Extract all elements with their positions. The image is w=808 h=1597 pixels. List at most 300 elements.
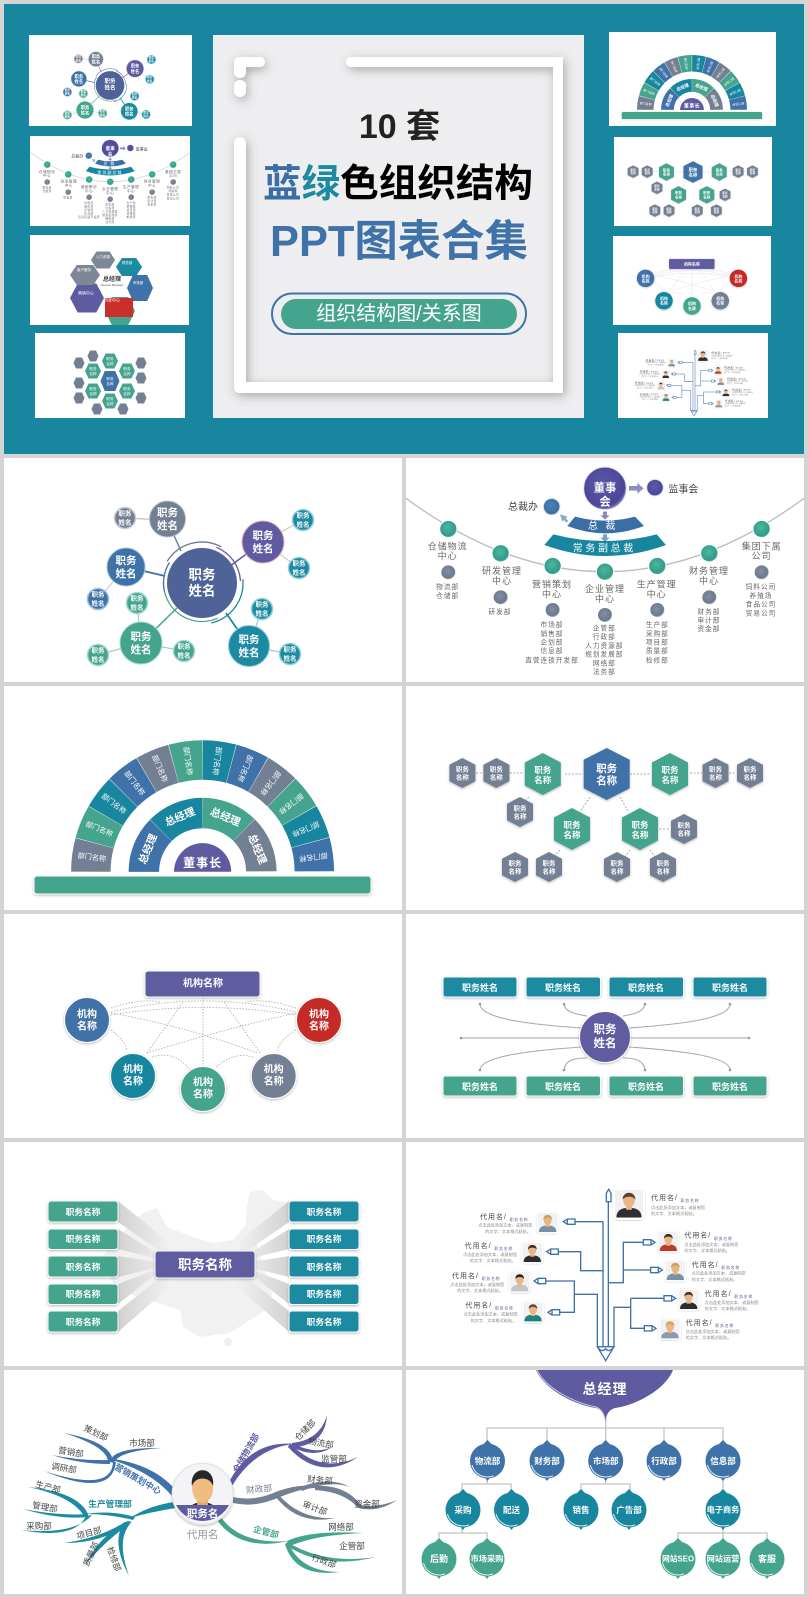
bottom row boxes: 职务姓名: [545, 1081, 581, 1092]
centre box: 职务名称: [178, 1256, 232, 1272]
hexagon labels: 职务: [514, 804, 527, 812]
person text: left 3: 点击此处添加文本，或复制您: [450, 1281, 504, 1287]
department labels: 调研部: [51, 1461, 78, 1475]
person text: right 4: 代用名/: [705, 1289, 732, 1298]
row 3 nodes: [422, 1538, 784, 1579]
president office node: 总裁办: [508, 500, 538, 513]
hexagon labels: 名称: [514, 812, 527, 820]
connector end dots: [460, 1003, 750, 1071]
small node labels: 姓名: [178, 650, 190, 660]
centre circle: 姓名: [594, 1036, 616, 1050]
outer ring labels: 部门名称: [182, 746, 194, 776]
centre box: [155, 1251, 255, 1278]
column: marketing: 直营连锁开发部: [525, 655, 579, 664]
column: enterprise: 网络部: [593, 658, 616, 667]
purple branches: [228, 1415, 358, 1486]
outer ring labels: 部门名称: [291, 819, 321, 839]
hexagon labels: 职务: [678, 820, 691, 830]
circle nodes: [64, 998, 342, 1112]
column: marketing: 企划部: [541, 637, 563, 646]
person text: right 4: 的文字、文本格式粘贴。: [705, 1305, 750, 1311]
right boxes: 职务名称: [307, 1206, 342, 1217]
person text: right 5: [686, 1318, 740, 1340]
left boxes: 职务名称: [66, 1233, 101, 1244]
large node labels: 姓名: [116, 567, 136, 580]
department labels: 监管部: [321, 1454, 347, 1464]
department labels: 仓储部: [292, 1417, 318, 1443]
large node labels: [116, 506, 274, 659]
hexagon labels: 职务: [610, 858, 624, 868]
centre node: 职务: [188, 568, 216, 582]
arrows: [560, 483, 644, 542]
outer ring labels: 部门名称: [236, 753, 255, 783]
connector plugs: [534, 1219, 676, 1331]
department labels: 财务部: [307, 1474, 334, 1486]
hexagon labels: [456, 762, 757, 876]
row 2 nodes: 电子商务: [707, 1504, 739, 1514]
person text: left 2: 职务名称: [494, 1245, 513, 1251]
thumbnail: hexagon flower: [35, 333, 185, 418]
row 1 nodes: 财务部: [534, 1456, 560, 1466]
panel: radial boxes: [406, 914, 804, 1138]
bottom row boxes: [443, 1076, 767, 1096]
circle nodes: 名称: [264, 1074, 284, 1088]
small node labels: 职务: [92, 590, 105, 598]
department labels: 项目部: [75, 1525, 103, 1541]
column: finance: 资金部: [698, 624, 720, 633]
column: marketing: 销售部: [541, 629, 563, 638]
outer ring labels: 部门名称: [100, 791, 128, 816]
person text: left 1: [478, 1212, 532, 1234]
thumbnail: hexagon ring: 营销中心: [78, 290, 94, 296]
heading: 10 set: 10 套: [359, 108, 440, 146]
row 3 nodes: 市场采购: [471, 1554, 503, 1564]
teal branches: [21, 1487, 176, 1576]
person text: top: 点击此处添加文本，或复制您: [651, 1204, 705, 1210]
circle nodes: 机构: [123, 1062, 143, 1076]
blue branches: [44, 1433, 174, 1496]
branch titles: 生产管理部: [88, 1498, 132, 1509]
bottom row boxes: 职务姓名: [712, 1081, 748, 1092]
row 3 nodes: 后勤: [430, 1553, 448, 1564]
person text: left 1: 职务名称: [510, 1216, 528, 1222]
circle nodes: 名称: [77, 1020, 97, 1032]
person text: right 2: 代用名/: [684, 1230, 711, 1239]
thumbnail: hexagon ring: [30, 235, 189, 325]
panel: pencil org chart: [406, 1142, 804, 1366]
hexagon labels: 名称: [744, 772, 757, 782]
outer ring labels: 部门名称: [84, 819, 114, 839]
large node labels: 姓名: [238, 646, 260, 659]
right boxes: 职务名称: [307, 1261, 342, 1272]
row 1 nodes: 市场部: [593, 1456, 619, 1466]
column: enterprise: 规划发展部: [585, 649, 623, 658]
top box: [145, 971, 260, 997]
person text: left 2: 代用名/: [465, 1241, 492, 1250]
small nodes: [88, 508, 314, 666]
general manager bubble: [536, 1370, 673, 1422]
person text: left 1: 点击此处添加文本，或复制您: [478, 1221, 532, 1227]
person text: left 3: 代用名/: [452, 1271, 479, 1280]
small node labels: 职务: [292, 558, 306, 568]
person text: right 3: 代用名/: [692, 1260, 719, 1269]
thumbnail: hexagon ring: 人力资源: [96, 254, 110, 259]
right boxes: 职务名称: [307, 1233, 342, 1244]
small node labels: 姓名: [292, 568, 306, 576]
column: R&D: 研发部: [489, 607, 511, 616]
vice president band: [544, 534, 666, 556]
row 2 nodes: 销售: [572, 1505, 590, 1515]
department labels: [26, 1417, 380, 1573]
hexagon labels: 职务: [508, 858, 522, 868]
hexagon labels: 职务: [490, 764, 503, 774]
small node labels: 姓名: [92, 654, 104, 664]
left boxes: [48, 1201, 118, 1332]
thumbnail: hexagon flower: 职务: [89, 366, 97, 371]
hexagon labels: 职务: [456, 764, 469, 774]
column: marketing: 信息部: [541, 646, 563, 655]
person text: top: 的文字、文本格式粘贴。: [651, 1210, 697, 1216]
column: production: 项目部: [646, 637, 669, 646]
thumbnail: hexagon flower: 职务: [89, 386, 97, 391]
column: warehouse: [428, 520, 468, 600]
department labels: 质量部: [81, 1540, 101, 1568]
column: production: 生产管理: [637, 578, 677, 589]
column: finance: 中心: [699, 575, 719, 586]
thumbnail: hexagon flower: 名称: [123, 371, 131, 376]
hexagon labels: 职务: [709, 764, 722, 774]
outer ring labels: 部门名称: [150, 753, 169, 783]
column: enterprise: 企业管理: [585, 583, 625, 594]
outer ring labels: 部门名称: [277, 791, 305, 816]
subtitle pill: 组织结构图/关系图: [316, 302, 482, 325]
chairman: [174, 843, 231, 872]
column: marketing: 中心: [542, 588, 562, 599]
circle nodes: 名称: [193, 1088, 213, 1100]
supervisory node: [647, 479, 698, 496]
row 2 nodes: 采购: [454, 1505, 472, 1515]
thumbnail: hexagon flower: 名称: [106, 401, 114, 406]
thumbnail: hexagon flower: 职务: [123, 386, 131, 391]
left boxes: 职务名称: [66, 1206, 101, 1217]
circle nodes: 名称: [309, 1020, 329, 1032]
large node labels: 职务: [157, 506, 178, 519]
thumbnail: hexagon ring: 财务部: [122, 260, 133, 265]
rays: [118, 1201, 289, 1332]
hexagons: [449, 748, 763, 882]
person text: right 3: [692, 1260, 746, 1282]
person text: left 4: 代用名/: [465, 1300, 492, 1309]
column: warehouse: 仓储物流: [428, 541, 468, 552]
small node labels: 职务: [92, 646, 105, 654]
top row boxes: 职务姓名: [545, 982, 581, 993]
vice president band: 常务副总裁: [573, 541, 636, 554]
thumbnail: hexagon flower: 名称: [123, 391, 131, 396]
heading: PPT chart collection: PPT图表合集: [270, 218, 528, 266]
department labels: 营销部: [58, 1445, 85, 1459]
department labels: 检修部: [105, 1545, 123, 1573]
panel: cover: [4, 4, 804, 454]
department labels: 行政部: [310, 1552, 338, 1570]
outer ring labels: 部门名称: [258, 769, 283, 797]
thumbnail: board structure: [30, 136, 190, 226]
hexagon labels: 名称: [656, 866, 670, 876]
column: finance: 财务管理: [689, 565, 729, 576]
centre node: [146, 527, 258, 639]
column: enterprise: 行政部: [593, 632, 616, 641]
column: enterprise: 人力资源部: [585, 641, 623, 650]
centre node: 姓名: [188, 582, 216, 598]
thumbnail: hexagon flower: 名称: [89, 371, 97, 376]
person text: left 3: [450, 1271, 504, 1293]
thumbnail: hexagon flower: 名称: [89, 391, 97, 396]
column: warehouse: 仓储部: [436, 591, 459, 600]
column: R&D: 研发管理: [482, 565, 522, 576]
small node labels: 姓名: [296, 520, 310, 528]
column: R&D: 中心: [492, 575, 512, 586]
small node labels: 职务: [256, 600, 269, 608]
department labels: 资金部: [354, 1499, 380, 1509]
column: finance: 财务部: [698, 607, 720, 616]
person text: left 2: 点击此处添加文本，或复制您: [463, 1251, 517, 1257]
column: R&D: [482, 545, 522, 616]
column: enterprise: 法务部: [593, 667, 616, 676]
dotted arrows: [476, 773, 736, 858]
column: group subsidiaries: 食品公司: [746, 599, 776, 608]
column: group subsidiaries: 养殖场: [750, 591, 772, 600]
person text: right 3: 点击此处添加文本，或复制您: [692, 1269, 746, 1275]
department labels: 企管部: [339, 1541, 365, 1551]
hexagon labels: 职务: [744, 764, 757, 774]
thumbnail: hexagon ring: 总经理: [103, 275, 121, 283]
column: group subsidiaries: 贸易公司: [746, 608, 776, 617]
connector lines: [98, 518, 303, 655]
row 3 nodes: 网站运营: [707, 1554, 739, 1564]
person text: left 3: 职务名称: [482, 1275, 500, 1281]
large node labels: 姓名: [157, 519, 178, 532]
branch titles: 仓储物流部: [230, 1431, 261, 1474]
small node labels: 姓名: [256, 608, 268, 618]
left boxes: 职务名称: [66, 1261, 101, 1272]
top box: 机构名称: [183, 976, 223, 990]
hexagon labels: 名称: [456, 772, 469, 782]
person text: top: 职务名称: [681, 1197, 699, 1203]
hexagon labels: 职务: [563, 820, 581, 830]
outer ring labels: 部门名称: [122, 769, 147, 797]
row 1 nodes: 信息部: [710, 1456, 736, 1466]
panel: general manager tree: [406, 1370, 804, 1594]
department labels: 物流部: [308, 1436, 335, 1450]
column: production: [637, 557, 677, 664]
hexagon labels: 职务: [656, 858, 670, 868]
thumbnail: hexagon flower: 名称: [106, 361, 114, 366]
thumbnail: hexagon ring: 市场部: [133, 280, 144, 285]
middle ring labels: 总经理: [245, 832, 270, 867]
green branches: [217, 1516, 376, 1573]
small node labels: 姓名: [284, 654, 296, 662]
large nodes: [107, 501, 284, 666]
right boxes: [289, 1201, 359, 1332]
panel: network chart: [4, 914, 402, 1138]
person text: left 2: 的文字、文本格式粘贴。: [470, 1257, 516, 1263]
thumbnail: hexagon flower: 名称: [106, 381, 114, 386]
outer ring labels: [77, 746, 328, 863]
top row boxes: 职务姓名: [462, 982, 498, 993]
central title card: [213, 35, 584, 418]
person text: right 4: 职务名称: [734, 1293, 753, 1299]
person text: right 5: 的文字、文本格式粘贴。: [686, 1334, 731, 1340]
left boxes: 职务名称: [66, 1288, 101, 1299]
central avatar: 职务名: [187, 1507, 218, 1520]
middle ring labels: 总经理: [208, 805, 243, 829]
tree lines: [439, 1418, 767, 1541]
person text: right 4: [705, 1289, 759, 1311]
column: enterprise: [585, 563, 625, 676]
person text: left 4: 的文字、文本格式粘贴。: [471, 1317, 516, 1323]
connector lines: [546, 1222, 664, 1347]
heading: blue green organisation structure: 蓝绿色组织结构: [263, 162, 533, 206]
person text: right 2: 的文字、文本格式粘贴。: [684, 1247, 730, 1253]
person text: right 2: [684, 1230, 738, 1253]
person text: right 4: 点击此处添加文本，或复制您: [705, 1299, 759, 1305]
middle ring labels: 总经理: [136, 832, 160, 866]
president band: 总裁: [588, 519, 623, 532]
hexagon labels: 职务: [661, 765, 679, 775]
board node: 董事: [594, 480, 616, 494]
department labels: 采购部: [26, 1521, 52, 1531]
branch titles: 营销策划中心: [113, 1461, 164, 1497]
board node: 会: [599, 494, 611, 508]
department labels: 网络部: [328, 1522, 354, 1532]
thumbnail: hexagon ring: 客户服务: [77, 267, 91, 272]
row 2 nodes: [446, 1489, 740, 1530]
person text: right 2: 职务名称: [714, 1235, 733, 1241]
column: group subsidiaries: 公司: [752, 551, 772, 561]
column: marketing: [525, 557, 579, 664]
column: finance: 审计部: [698, 615, 720, 624]
general manager bubble: 总经理: [582, 1381, 628, 1397]
connector curves: [461, 1004, 749, 1070]
person text: right 3: 的文字、文本格式粘贴。: [692, 1276, 737, 1282]
panel: map and rays: [4, 1142, 402, 1366]
outer ring: [45, 714, 361, 1030]
dotted links: [111, 997, 296, 1070]
circle nodes: 机构: [77, 1008, 97, 1020]
person text: top: 代用名/: [651, 1193, 678, 1202]
panel: mind map: [4, 1370, 402, 1594]
panel: board structure: [406, 458, 804, 682]
curved line: [406, 498, 804, 572]
branch titles: [88, 1431, 280, 1540]
hexagon labels: 名称: [542, 866, 556, 876]
panel: hexagon tree: [406, 686, 804, 910]
column: group subsidiaries: 饲料公司: [746, 582, 776, 591]
row 2 nodes: 广告部: [616, 1505, 642, 1515]
president band: [567, 517, 644, 533]
column: production: 检修部: [646, 655, 669, 664]
hexagon labels: 名称: [709, 772, 722, 782]
president office node: [508, 498, 560, 515]
hexagon labels: 职务: [631, 820, 649, 830]
subtitle pill: [272, 294, 526, 334]
column: group subsidiaries: 集团下属: [742, 541, 782, 552]
thumbnail: hexagon ring: General Manager: [100, 283, 124, 287]
middle ring labels: 总经理: [163, 805, 197, 829]
small node labels: [92, 508, 310, 664]
column: production: 中心: [647, 588, 667, 599]
person text: left 2: [463, 1241, 517, 1263]
person text: left 1: 代用名/: [480, 1212, 507, 1221]
gray branches: [233, 1482, 397, 1520]
top row boxes: 职务姓名: [628, 982, 664, 993]
circle nodes: 机构: [264, 1062, 284, 1076]
thumbnail: bubble chart: [29, 35, 192, 126]
person text: left 4: [464, 1300, 518, 1323]
department labels: 生产部: [34, 1479, 62, 1495]
person text: right 3: 职务名称: [721, 1264, 740, 1270]
small node labels: 职务: [118, 508, 132, 518]
central avatar: [172, 1464, 233, 1524]
outer ring labels: 部门名称: [211, 746, 224, 776]
column: marketing: 市场部: [541, 620, 563, 629]
middle ring labels: [136, 805, 270, 867]
large node labels: 姓名: [252, 542, 274, 555]
hexagon labels: 名称: [563, 830, 581, 840]
department labels: 市场部: [129, 1438, 155, 1448]
column: production: 生产部: [646, 620, 669, 629]
person text: left 1: 的文字、文本格式粘贴。: [485, 1228, 531, 1234]
outer ring labels: 部门名称: [77, 851, 107, 863]
branch titles: 企管部: [252, 1523, 280, 1540]
department labels: 管理部: [32, 1500, 59, 1514]
avatar caption: 代用名: [187, 1528, 218, 1541]
hexagon labels: 名称: [631, 830, 649, 840]
column: enterprise: 中心: [595, 593, 615, 604]
small node labels: 姓名: [130, 602, 144, 612]
column: marketing: 营销策划: [532, 578, 572, 589]
bottom row boxes: 职务姓名: [462, 1081, 498, 1092]
right boxes: 职务名称: [307, 1288, 342, 1299]
panel: arch chart: [4, 686, 402, 1030]
row 3 nodes: 网站SEO: [662, 1554, 694, 1564]
small node labels: 职务: [130, 594, 144, 602]
hexagon labels: 名称: [610, 866, 624, 876]
person text: right 5: 职务名称: [715, 1322, 734, 1328]
large node labels: 姓名: [130, 643, 152, 656]
centre circle: 职务: [594, 1022, 617, 1036]
hexagon labels: 名称: [490, 772, 503, 782]
small node labels: 职务: [178, 642, 191, 650]
thumbnail: pencil: [618, 333, 768, 418]
thumbnail: hexagon tree: [614, 137, 772, 226]
centre circle: [580, 1012, 630, 1062]
supervisory node: 监事会: [668, 482, 698, 495]
thumbnail: arch: [609, 32, 776, 176]
column: warehouse: 物流部: [436, 582, 459, 591]
panel: bubble org chart: [4, 458, 402, 682]
large node labels: 职务: [130, 630, 152, 643]
thumbnail: hexagon flower: 职务: [106, 356, 114, 361]
right boxes: 职务名称: [307, 1316, 342, 1327]
white frame: [234, 57, 563, 393]
thumbnail: hexagon ring: 研发中心: [104, 296, 120, 302]
thumbnail: hexagon flower: 职务: [123, 366, 131, 371]
large node labels: 职务: [252, 529, 274, 542]
row 1 nodes: [470, 1440, 740, 1481]
hexagon labels: 名称: [534, 775, 552, 785]
middle ring: [120, 789, 286, 955]
hexagon labels: 名称: [508, 866, 522, 876]
